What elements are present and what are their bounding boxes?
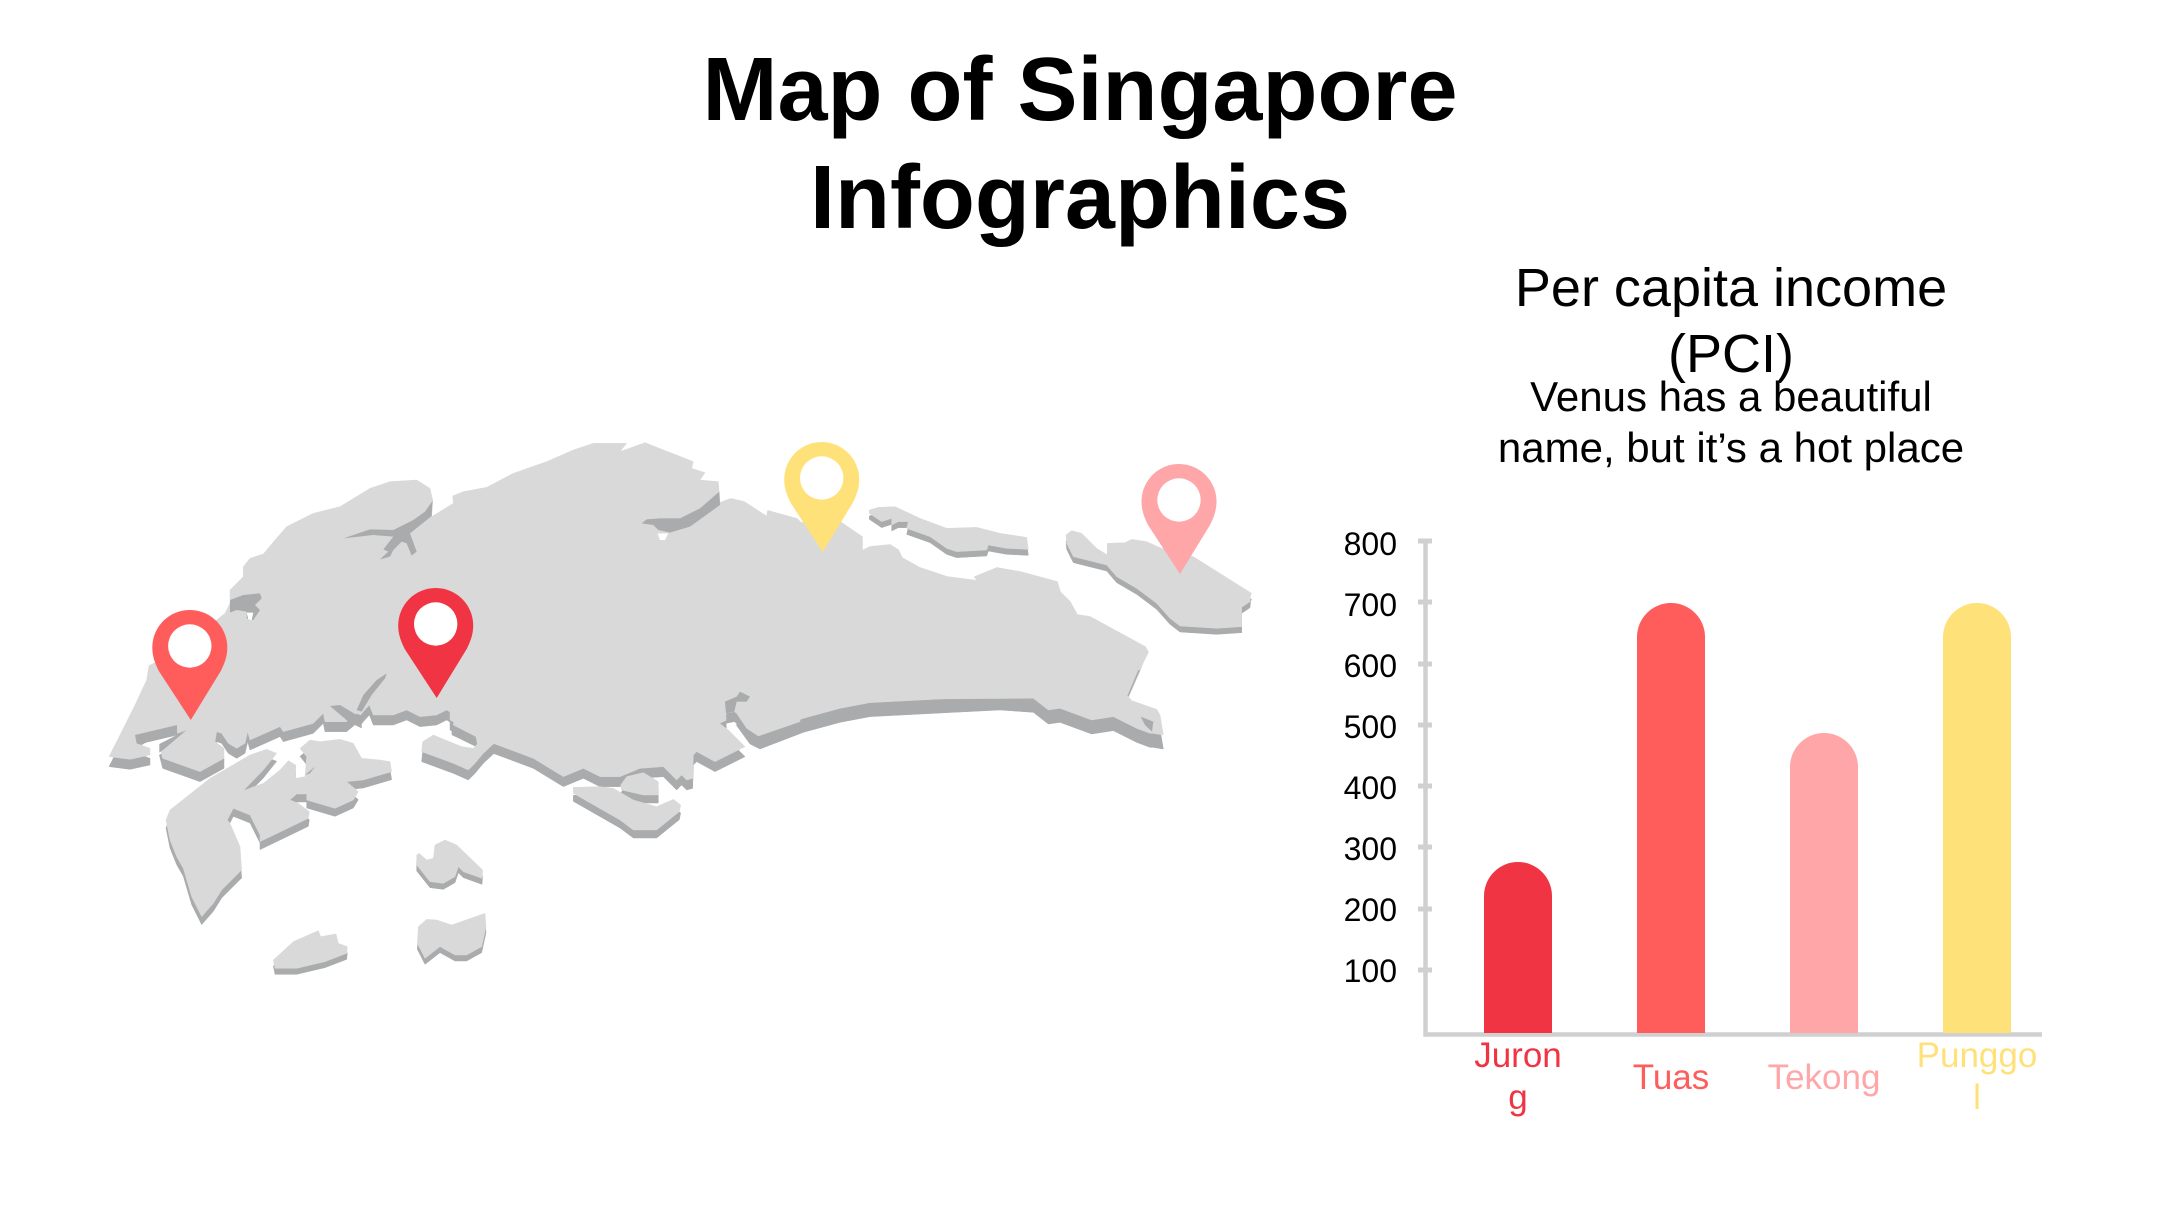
y axis labels: 300: [1344, 831, 1397, 867]
y axis labels: 700: [1344, 587, 1397, 623]
bar: Jurong: [1484, 862, 1552, 1033]
bar: Punggol: [1943, 603, 2011, 1033]
y axis labels: 800: [1344, 526, 1397, 562]
category label: Jurong: Juron: [1474, 1036, 1562, 1075]
category label: Punggol: Punggo: [1917, 1036, 2037, 1075]
chart description: [1498, 373, 1964, 471]
map of Singapore: [109, 442, 1252, 974]
map inlets: [135, 492, 1153, 775]
chart heading: (PCI): [1668, 324, 1794, 384]
bar chart: [1344, 526, 2042, 1117]
map land surface: [109, 443, 1252, 968]
category label: Tekong: Tekong: [1768, 1058, 1880, 1097]
title: Infographics: [810, 148, 1350, 248]
y axis labels: 100: [1344, 953, 1397, 989]
y axis labels: 400: [1344, 770, 1397, 806]
y axis labels: 500: [1344, 709, 1397, 745]
title: [702, 40, 1458, 248]
y axis labels: 600: [1344, 648, 1397, 684]
pin: Tuas: [152, 610, 227, 720]
category label: Punggol: l: [1973, 1078, 1981, 1117]
chart axes: [1418, 541, 2042, 1034]
chart description: name, but it’s a hot place: [1498, 424, 1964, 471]
pin: Punggol: [784, 442, 859, 552]
title: Map of Singapore: [702, 40, 1458, 140]
y axis labels: 200: [1344, 892, 1397, 928]
category label: Punggol: [1917, 1036, 2037, 1117]
category label: Tuas: Tuas: [1633, 1058, 1709, 1097]
bar: Tekong: [1790, 733, 1858, 1033]
pin: Jurong: [398, 588, 473, 698]
chart heading: Per capita income: [1515, 258, 1947, 318]
map extrusion shadow: [109, 513, 1252, 974]
bar: Tuas: [1637, 603, 1705, 1033]
y axis labels: [1344, 526, 1397, 989]
pin: Tekong: [1142, 464, 1216, 574]
chart description: Venus has a beautiful: [1530, 373, 1932, 420]
category label: Jurong: [1474, 1036, 1562, 1117]
chart heading: [1515, 258, 1947, 384]
category label: Jurong: g: [1508, 1078, 1528, 1117]
